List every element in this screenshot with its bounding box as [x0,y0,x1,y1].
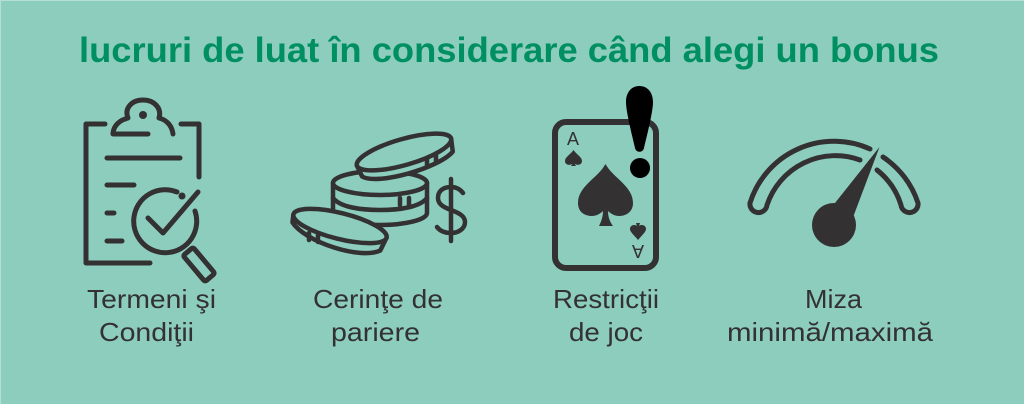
icon: ace of spades card with exclamation mark: A [632,241,644,261]
label: Miza minimă/maximă [727,284,934,347]
label: Termeni și Condiții: Condiţii [99,317,194,347]
bottom coin [288,202,390,260]
title: lucruri de luat în considerare când alegi un bonus [79,30,939,70]
icon: gauge [750,141,918,247]
label: Miza minimă/maximă: minimă/maximă [727,317,934,347]
label: Cerințe de pariere: pariere [331,317,420,347]
label: Restricții de joc: Restricţii [553,284,659,314]
exclamation mark [626,86,653,178]
label: Restricții de joc [553,284,659,347]
label: Cerințe de pariere [313,284,443,347]
icon: ace of spades card with exclamation mark [555,86,656,268]
label: Cerințe de pariere: Cerinţe de [313,284,443,314]
label: Restricții de joc: de joc [569,317,643,347]
label: Termeni și Condiții [87,284,216,347]
label: Miza minimă/maximă: Miza [805,284,863,314]
label: Termeni și Condiții: Termeni şi [87,284,216,314]
top coin [353,126,457,187]
icon: clipboard with magnifier [86,100,215,282]
icon: coins and dollar sign [288,126,465,260]
dollar sign [437,179,465,241]
middle coin stack [333,171,427,225]
icon: ace of spades card with exclamation mark: A [567,129,579,149]
